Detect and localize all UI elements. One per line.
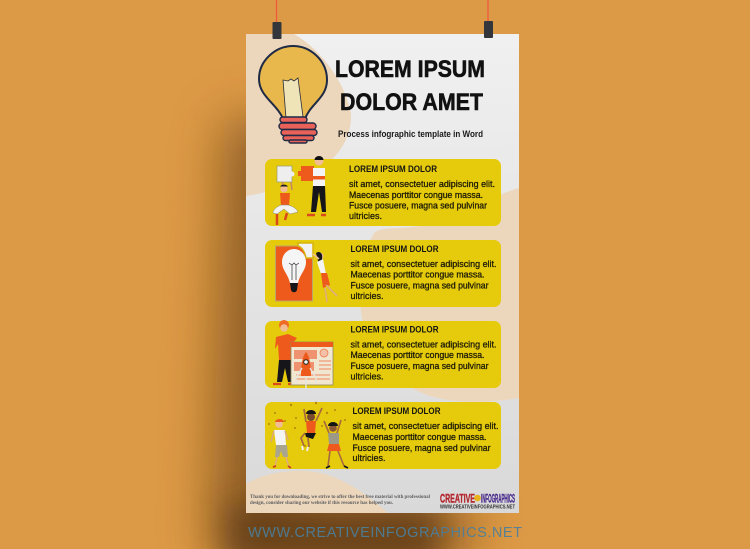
clip: right: [484, 21, 493, 38]
logo: WWW.CREATIVEINFOGRAPHICS.NET: [440, 504, 515, 510]
clip: left: [272, 22, 282, 39]
panel: step 4: [265, 402, 501, 469]
title: [335, 56, 485, 116]
text: Maecenas porttitor congue massa.: [352, 432, 486, 442]
footer note: design, consider sharing our website if this resource has helped you.: [250, 500, 394, 506]
text: Maecenas porttitor congue massa.: [349, 190, 483, 200]
beige background shapes: [246, 34, 519, 513]
icon: light bulb: [259, 46, 327, 143]
subtitle: Process infographic template in Word: [338, 129, 483, 139]
text: LOREM IPSUM DOLOR: [349, 164, 437, 175]
text: ultricies.: [349, 211, 382, 221]
website url: WWW.CREATIVEINFOGRAPHICS.NET: [248, 525, 522, 541]
text: [350, 244, 496, 301]
text: Maecenas porttitor congue massa.: [350, 350, 484, 360]
text: Maecenas porttitor congue massa.: [350, 270, 484, 280]
title: DOLOR AMET: [340, 89, 483, 116]
text: LOREM IPSUM DOLOR: [350, 324, 439, 336]
panel: step 3: [265, 320, 501, 389]
text: ultricies.: [352, 453, 386, 463]
text: [352, 406, 498, 463]
text: ultricies.: [350, 372, 384, 382]
text: sit amet, consectetuer adipiscing elit.: [352, 421, 498, 431]
footer note: [250, 494, 430, 506]
text: INFOGRAPHICS: [481, 492, 515, 506]
text: Fusce posuere, magna sed pulvinar: [350, 280, 488, 290]
text: sit amet, consectetuer adipiscing elit.: [350, 259, 496, 269]
text: ultricies.: [350, 291, 384, 301]
text: LOREM IPSUM DOLOR: [350, 244, 439, 255]
illustration: puzzle people: [273, 156, 326, 225]
text: [349, 164, 495, 221]
illustration: rocket dashboard: [273, 320, 333, 389]
poster shadow: [210, 120, 470, 549]
text: LOREM IPSUM DOLOR: [352, 406, 441, 417]
text: [350, 324, 496, 382]
logo: CREATIVE: [440, 492, 475, 506]
panel: step 1: [265, 156, 501, 226]
text: Fusce posuere, magna sed pulvinar: [350, 361, 488, 371]
illustration: celebrating people: [268, 402, 348, 468]
hanging strings: [276, 0, 488, 22]
text: sit amet, consectetuer adipiscing elit.: [350, 340, 496, 350]
footer note: Thank you for downloading, we strive to offer the best free material with professional: [250, 494, 430, 500]
title: LOREM IPSUM: [335, 56, 485, 83]
panel: step 2: [265, 240, 501, 307]
logo: [440, 492, 515, 510]
poster: [246, 34, 519, 513]
text: Fusce posuere, magna sed pulvinar: [352, 443, 490, 453]
text: sit amet, consectetuer adipiscing elit.: [349, 179, 495, 189]
illustration: bulb poster: [276, 243, 337, 302]
text: Fusce posuere, magna sed pulvinar: [349, 200, 487, 210]
